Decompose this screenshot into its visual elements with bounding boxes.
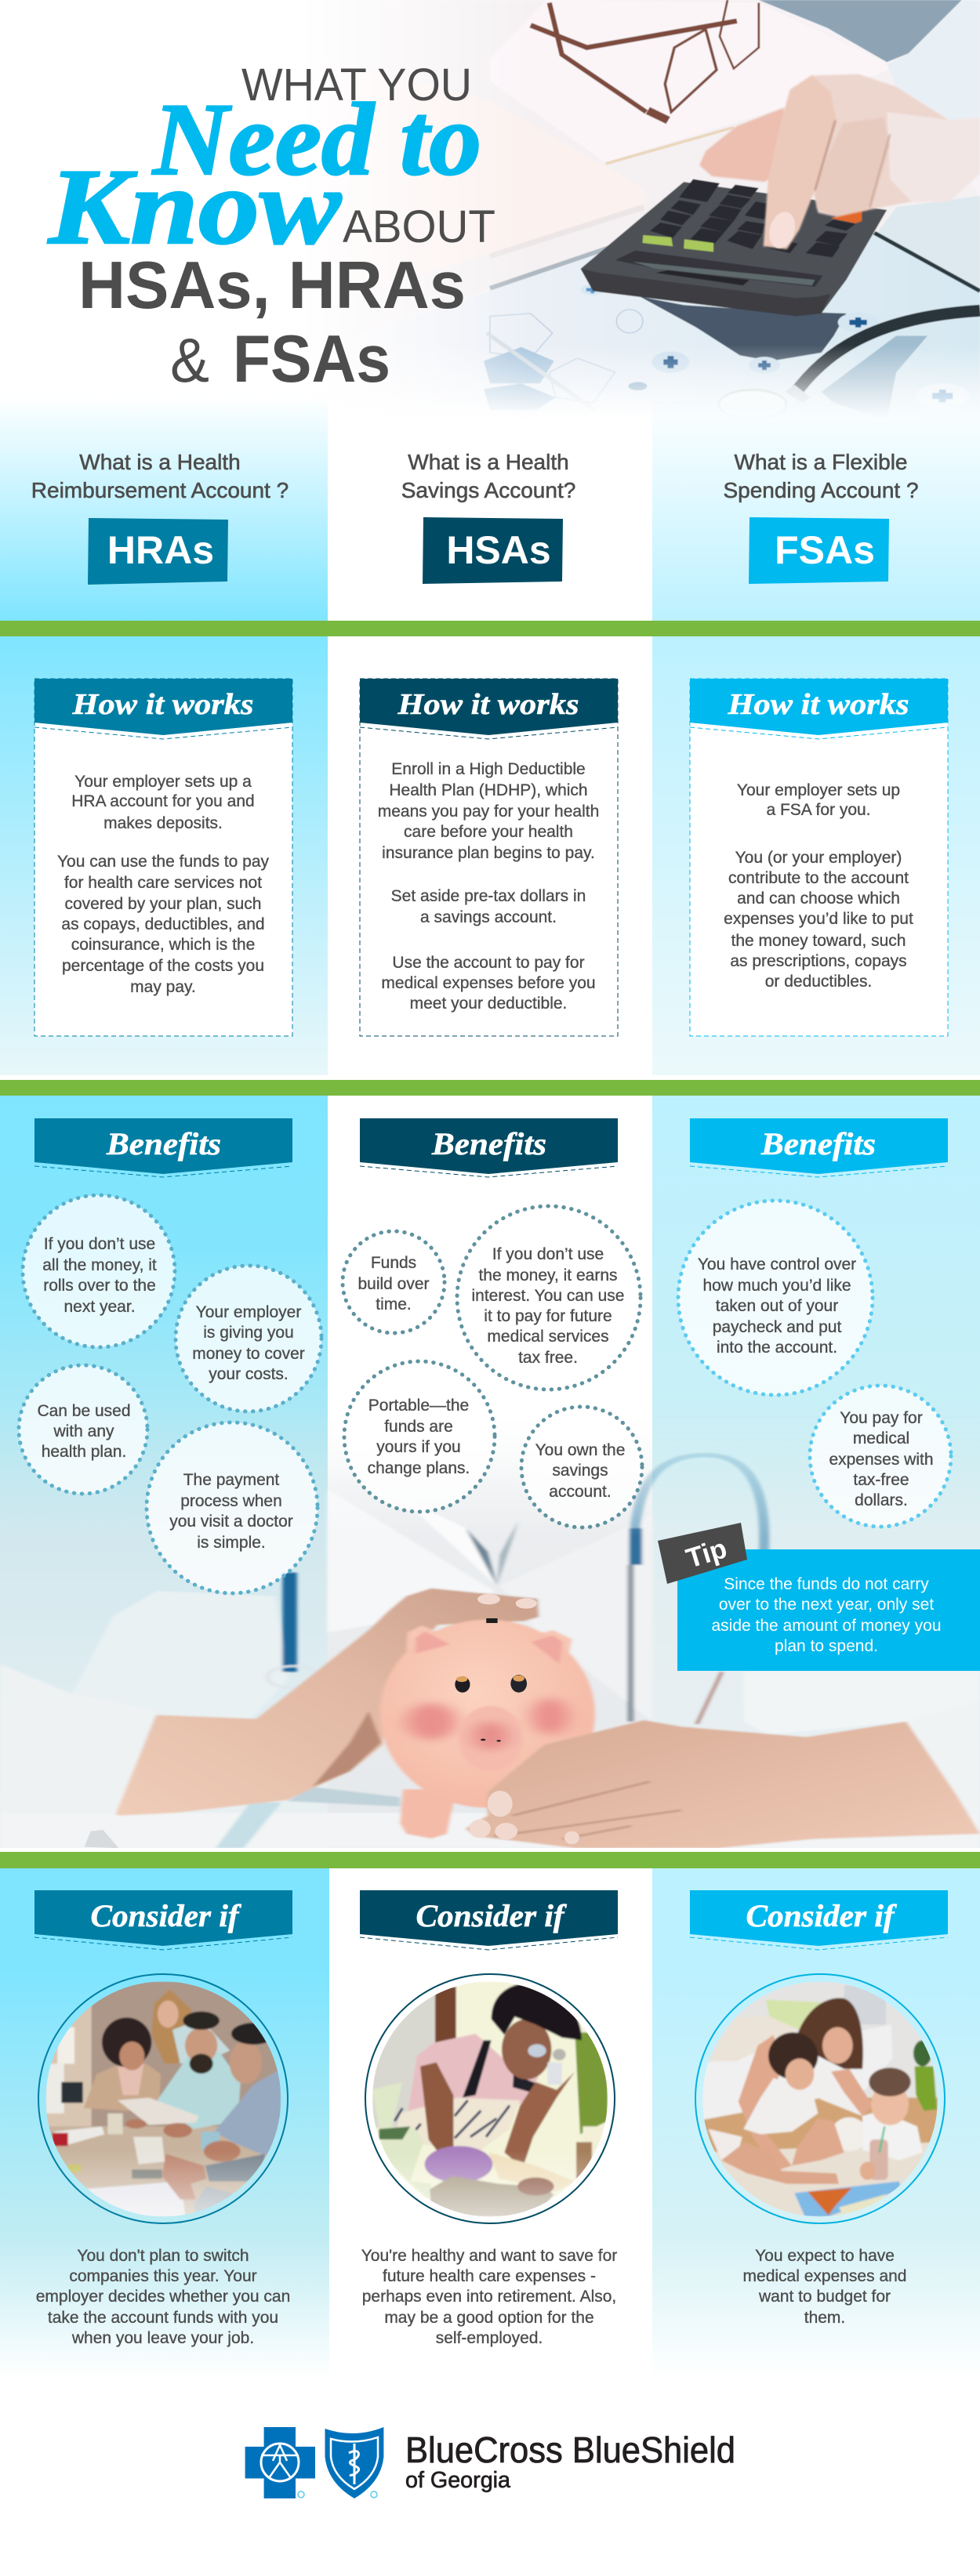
bubble: portable bbox=[344, 1361, 495, 1512]
question: HSA: Savings Account? bbox=[401, 478, 575, 502]
bubble: tax-free dollars: You pay for bbox=[840, 1409, 923, 1427]
bubble: control: taken out of your bbox=[716, 1297, 838, 1315]
bubble: tax-free dollars bbox=[810, 1386, 951, 1527]
column backgrounds: how it works bbox=[0, 636, 980, 1075]
banner: benefits: Benefits bbox=[760, 1126, 876, 1161]
title script: Need to: Need to bbox=[151, 82, 481, 197]
title line: ABOUT: ABOUT bbox=[343, 201, 495, 252]
bubble: portable: funds are bbox=[384, 1418, 453, 1436]
bubble: tax-free dollars: expenses with bbox=[829, 1451, 934, 1469]
bubble: rolls over: If you don’t use bbox=[44, 1235, 155, 1253]
icon: blue cross bbox=[245, 2427, 315, 2498]
panel: HSA benefits bbox=[343, 1118, 642, 1527]
hero photo: calculator, glasses and stethoscope bbox=[423, 0, 980, 412]
bubble: funds build bbox=[343, 1231, 445, 1333]
title line: HSAs, HRAs: HSAs, HRAs bbox=[78, 248, 466, 323]
text block bbox=[57, 773, 270, 996]
question: FSA bbox=[723, 450, 919, 502]
text block: You expect to have bbox=[755, 2247, 895, 2265]
bubble: own the account: account. bbox=[549, 1483, 612, 1501]
text block: when you leave your job. bbox=[71, 2329, 254, 2347]
banner: benefits bbox=[360, 1118, 618, 1177]
banner: consider if: Consider if bbox=[91, 1898, 241, 1933]
text block: You (or your employer) bbox=[735, 849, 902, 867]
question: HRA bbox=[31, 450, 289, 502]
question: HSA bbox=[401, 450, 575, 502]
column backgrounds: benefits bbox=[0, 1096, 980, 1849]
text block bbox=[36, 2247, 290, 2347]
banner: consider if bbox=[34, 1890, 292, 1950]
photo: florist on the phone bbox=[365, 1974, 615, 2223]
text block: them. bbox=[804, 2309, 845, 2327]
bubble: earns interest: If you don’t use bbox=[492, 1245, 604, 1263]
bubble: any health plan: with any bbox=[53, 1422, 114, 1440]
banner: benefits: Benefits bbox=[431, 1126, 546, 1161]
tip text: plan to spend. bbox=[775, 1637, 878, 1655]
banner: benefits bbox=[34, 1118, 292, 1177]
tip tag bbox=[658, 1523, 747, 1584]
bubble: portable: Portable—the bbox=[368, 1397, 469, 1415]
text block: medical expenses before you bbox=[381, 974, 596, 992]
banner: consider if bbox=[360, 1890, 618, 1950]
panel: HSA how it works bbox=[360, 679, 618, 1036]
bubble: control: how much you’d like bbox=[702, 1277, 851, 1295]
text block: meet your deductible. bbox=[410, 995, 567, 1013]
photo: doctor's hands protecting a piggy bank bbox=[0, 1405, 980, 1848]
label: FSAs bbox=[749, 517, 889, 584]
panel: FSA consider if bbox=[690, 1890, 948, 2327]
bubble: control: into the account. bbox=[717, 1339, 837, 1357]
bubble: own the account: You own the bbox=[535, 1441, 625, 1459]
label: HSAs bbox=[423, 517, 563, 584]
bubble: rolls over: all the money, it bbox=[42, 1256, 157, 1274]
panel: HRA benefits bbox=[19, 1118, 321, 1593]
bubble: funds build: Funds bbox=[371, 1254, 416, 1272]
bubble: earns interest: interest. You can use bbox=[472, 1287, 624, 1305]
text block: or deductibles. bbox=[765, 973, 872, 991]
bubble: earns interest: tax free. bbox=[518, 1349, 578, 1367]
banner: how it works bbox=[690, 679, 948, 739]
tip tag: Tip bbox=[683, 1533, 731, 1574]
question: FSA: What is a Flexible bbox=[735, 450, 907, 474]
banner: how it works bbox=[360, 679, 618, 739]
bubble: any health plan: health plan. bbox=[42, 1443, 126, 1461]
photo: coworkers reviewing a document bbox=[38, 1974, 288, 2223]
text block: may pay. bbox=[130, 978, 196, 996]
intro column: HRAs bbox=[31, 450, 289, 585]
question: HRA: What is a Health bbox=[79, 450, 241, 474]
text block: Set aside pre-tax dollars in bbox=[391, 887, 586, 905]
wordmark bbox=[405, 2429, 735, 2493]
banner: consider if: Consider if bbox=[746, 1898, 897, 1933]
text block: makes deposits. bbox=[103, 814, 223, 832]
title bbox=[47, 60, 495, 397]
title line: & FSAs: FSAs bbox=[233, 322, 390, 397]
bubble: employer money bbox=[176, 1266, 321, 1411]
callout: tip bbox=[658, 1523, 980, 1671]
bubble: employer money: money to cover bbox=[192, 1345, 305, 1363]
text block: care before your health bbox=[404, 823, 573, 841]
icon: blue shield bbox=[325, 2427, 383, 2498]
text block bbox=[378, 760, 599, 1013]
label: HRAs bbox=[88, 518, 228, 585]
text block: covered by your plan, such bbox=[65, 895, 261, 913]
title script: Know: Know bbox=[47, 147, 342, 266]
text block: a FSA for you. bbox=[766, 801, 871, 819]
text block: Use the account to pay for bbox=[392, 954, 585, 972]
tip text: Since the funds do not carry bbox=[724, 1575, 929, 1593]
bubble: simple payment: you visit a doctor bbox=[169, 1513, 293, 1531]
text block: Your employer sets up bbox=[737, 781, 900, 799]
bubble: tax-free dollars: tax-free bbox=[853, 1471, 909, 1489]
tip text: aside the amount of money you bbox=[711, 1617, 942, 1635]
bubble: tax-free dollars: medical bbox=[853, 1429, 909, 1447]
green divider bbox=[0, 1080, 980, 1096]
banner: how it works: How it works bbox=[71, 688, 254, 721]
title line: WHAT YOU: WHAT YOU bbox=[241, 60, 472, 111]
bubble: funds build: build over bbox=[358, 1275, 430, 1293]
panel: HRA how it works bbox=[34, 679, 292, 1036]
bubble: any health plan bbox=[19, 1365, 147, 1494]
banner: consider if bbox=[690, 1890, 948, 1950]
banner: benefits: Benefits bbox=[106, 1126, 221, 1161]
text block: You don't plan to switch bbox=[77, 2247, 249, 2265]
panel: FSA how it works bbox=[690, 679, 948, 1036]
text block: means you pay for your health bbox=[378, 803, 599, 821]
text block: the money toward, such bbox=[731, 932, 906, 950]
bubble: rolls over: next year. bbox=[64, 1298, 136, 1316]
green divider bbox=[0, 621, 980, 636]
text block: perhaps even into retirement. Also, bbox=[362, 2288, 616, 2306]
panel: HRA consider if bbox=[34, 1890, 292, 2347]
label: HSAs: HSAs bbox=[446, 528, 551, 572]
text block: Your employer sets up a bbox=[74, 773, 252, 791]
tip text: over to the next year, only set bbox=[719, 1596, 934, 1614]
text block: HRA account for you and bbox=[71, 792, 255, 810]
text block bbox=[724, 781, 913, 991]
bubble: rolls over bbox=[23, 1195, 175, 1347]
tip text bbox=[711, 1575, 942, 1655]
bubble: simple payment: The payment bbox=[183, 1471, 279, 1489]
banner: how it works: How it works bbox=[397, 688, 579, 721]
text block: may be a good option for the bbox=[384, 2309, 594, 2327]
banner: how it works: How it works bbox=[727, 688, 909, 721]
white strip above divider bbox=[0, 1848, 980, 1852]
banner: benefits bbox=[690, 1118, 948, 1177]
bubble: own the account: savings bbox=[552, 1462, 608, 1480]
column backgrounds: consider if bbox=[0, 1868, 980, 2379]
text block: Enroll in a High Deductible bbox=[391, 760, 586, 778]
intro column: HSAs bbox=[401, 450, 575, 584]
bubble: portable: yours if you bbox=[376, 1438, 461, 1456]
bubble: earns interest bbox=[457, 1206, 641, 1389]
panel: FSA benefits bbox=[658, 1118, 980, 1671]
bubble: simple payment bbox=[147, 1422, 318, 1593]
text block: medical expenses and bbox=[743, 2267, 906, 2285]
bubble: earns interest: the money, it earns bbox=[478, 1266, 618, 1284]
question: HSA: What is a Health bbox=[408, 450, 569, 474]
text block: as prescriptions, copays bbox=[730, 952, 907, 970]
bubble: tax-free dollars: dollars. bbox=[855, 1491, 908, 1509]
text block: for health care services not bbox=[64, 874, 262, 892]
text block: companies this year. Your bbox=[69, 2267, 257, 2285]
text block: You're healthy and want to save for bbox=[361, 2247, 617, 2265]
text block: insurance plan begins to pay. bbox=[382, 844, 595, 862]
banner: consider if: Consider if bbox=[416, 1898, 567, 1933]
logo: BlueCross BlueShield of Georgia bbox=[245, 2427, 735, 2498]
bubble: simple payment: process when bbox=[180, 1492, 282, 1510]
text block: coinsurance, which is the bbox=[71, 936, 255, 954]
text block: expenses you’d like to put bbox=[724, 910, 913, 928]
text block: as copays, deductibles, and bbox=[61, 915, 265, 933]
bubble: rolls over: rolls over to the bbox=[43, 1277, 156, 1295]
text block: future health care expenses - bbox=[383, 2267, 596, 2285]
banner: how it works bbox=[34, 679, 292, 739]
text block: Health Plan (HDHP), which bbox=[389, 781, 588, 799]
text block: employer decides whether you can bbox=[36, 2288, 290, 2306]
label: FSAs: FSAs bbox=[775, 528, 875, 572]
title line: & FSAs bbox=[170, 322, 390, 397]
bubble: portable: change plans. bbox=[368, 1459, 470, 1477]
intro column: FSAs bbox=[723, 450, 919, 584]
column backgrounds: intro bbox=[0, 396, 980, 621]
text block: and can choose which bbox=[737, 889, 900, 908]
bubble: simple payment: is simple. bbox=[197, 1534, 266, 1552]
text block: contribute to the account bbox=[728, 869, 909, 887]
bubble: control: You have control over bbox=[698, 1255, 856, 1274]
text block: want to budget for bbox=[758, 2288, 891, 2306]
wordmark: BlueCross BlueShield bbox=[405, 2429, 735, 2470]
title line: & FSAs: & bbox=[170, 325, 209, 395]
text block bbox=[361, 2247, 617, 2347]
text block: take the account funds with you bbox=[48, 2309, 278, 2327]
text block: self-employed. bbox=[436, 2329, 543, 2347]
bubble: funds build: time. bbox=[376, 1295, 412, 1313]
photo: mother and children on the floor bbox=[695, 1974, 945, 2223]
text block: a savings account. bbox=[420, 908, 557, 926]
text block: percentage of the costs you bbox=[62, 957, 264, 975]
bubble: earns interest: it to pay for future bbox=[484, 1307, 612, 1325]
text block: You can use the funds to pay bbox=[57, 853, 270, 871]
bubble: employer money: is giving you bbox=[203, 1324, 294, 1342]
bubble: control: paycheck and put bbox=[713, 1318, 841, 1336]
bubble: employer money: Your employer bbox=[196, 1303, 301, 1321]
question: HRA: Reimbursement Account ? bbox=[31, 478, 289, 502]
green divider bbox=[0, 1852, 980, 1868]
bubble: control bbox=[678, 1201, 873, 1395]
text block bbox=[743, 2247, 906, 2327]
question: FSA: Spending Account ? bbox=[723, 478, 919, 502]
bubble: employer money: your costs. bbox=[209, 1365, 289, 1383]
bubble: earns interest: medical services bbox=[487, 1328, 609, 1346]
panel: HSA consider if bbox=[360, 1890, 618, 2347]
label: HRAs: HRAs bbox=[107, 528, 214, 572]
wordmark: of Georgia bbox=[405, 2468, 511, 2493]
bubble: any health plan: Can be used bbox=[37, 1402, 131, 1420]
bubble: own the account bbox=[521, 1407, 642, 1527]
